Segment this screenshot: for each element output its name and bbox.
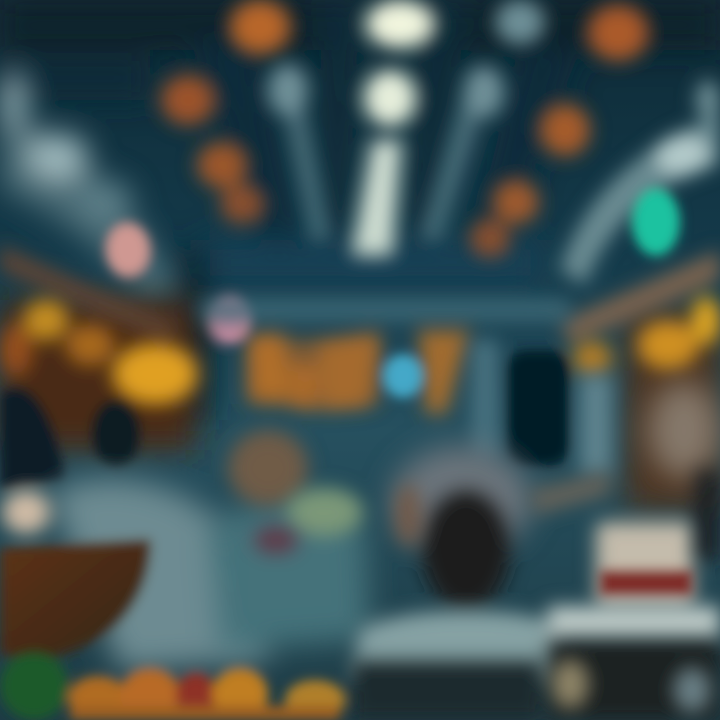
ceiling shadows [0,0,720,420]
right arched roof [560,80,720,285]
left stall [0,245,197,450]
pink lanterns [106,223,252,344]
ceiling light beams [268,0,544,255]
left arched roof [0,70,180,310]
pillars [472,340,612,475]
crowd: foreground person [350,446,610,720]
right stall [560,250,720,510]
right counter with cake [548,382,720,720]
banner letters [250,330,470,414]
hanging orange lanterns [161,0,648,257]
central banner [200,298,570,414]
crowd: centre person [210,430,370,650]
fruit pile [0,652,345,720]
crowd: left people [0,388,270,670]
dark doorway [506,350,570,466]
blue banner orb [383,354,423,398]
wooden bowl [0,540,150,660]
teal accent lantern [632,188,680,256]
